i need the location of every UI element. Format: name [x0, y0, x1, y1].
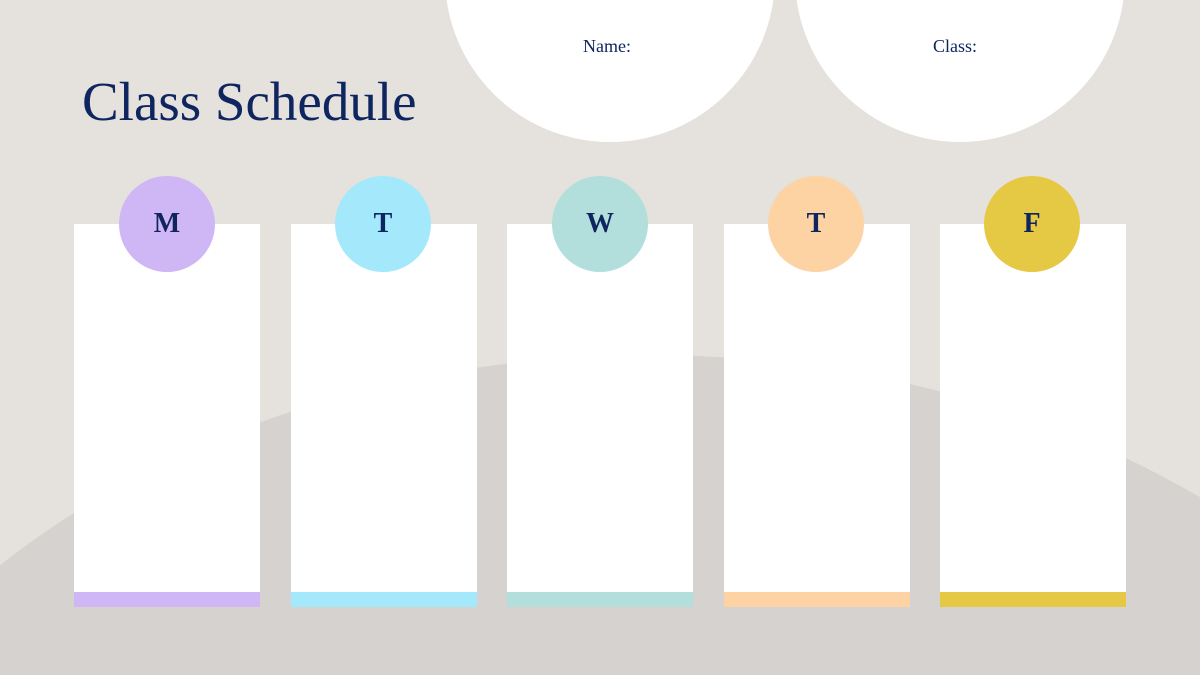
- day badge M: M: [154, 208, 180, 239]
- column: Wednesday: [507, 224, 693, 607]
- day badge T: [335, 176, 431, 272]
- name label: Name:: [583, 36, 631, 56]
- day badge F: [984, 176, 1080, 272]
- title: Class Schedule: [82, 71, 417, 132]
- day badge W: W: [586, 208, 614, 239]
- column: Thursday: [724, 224, 910, 607]
- column: Monday: [74, 224, 260, 607]
- day badge T: T: [807, 208, 825, 239]
- class circle: [795, 0, 1125, 142]
- column: Tuesday: [291, 224, 477, 607]
- day badge T: [768, 176, 864, 272]
- name circle: [445, 0, 775, 142]
- day badge F: F: [1023, 208, 1041, 239]
- day badge T: T: [374, 208, 392, 239]
- day badge W: [552, 176, 648, 272]
- class label: Class:: [933, 36, 977, 56]
- day badge M: [119, 176, 215, 272]
- column: Friday: [940, 224, 1126, 607]
